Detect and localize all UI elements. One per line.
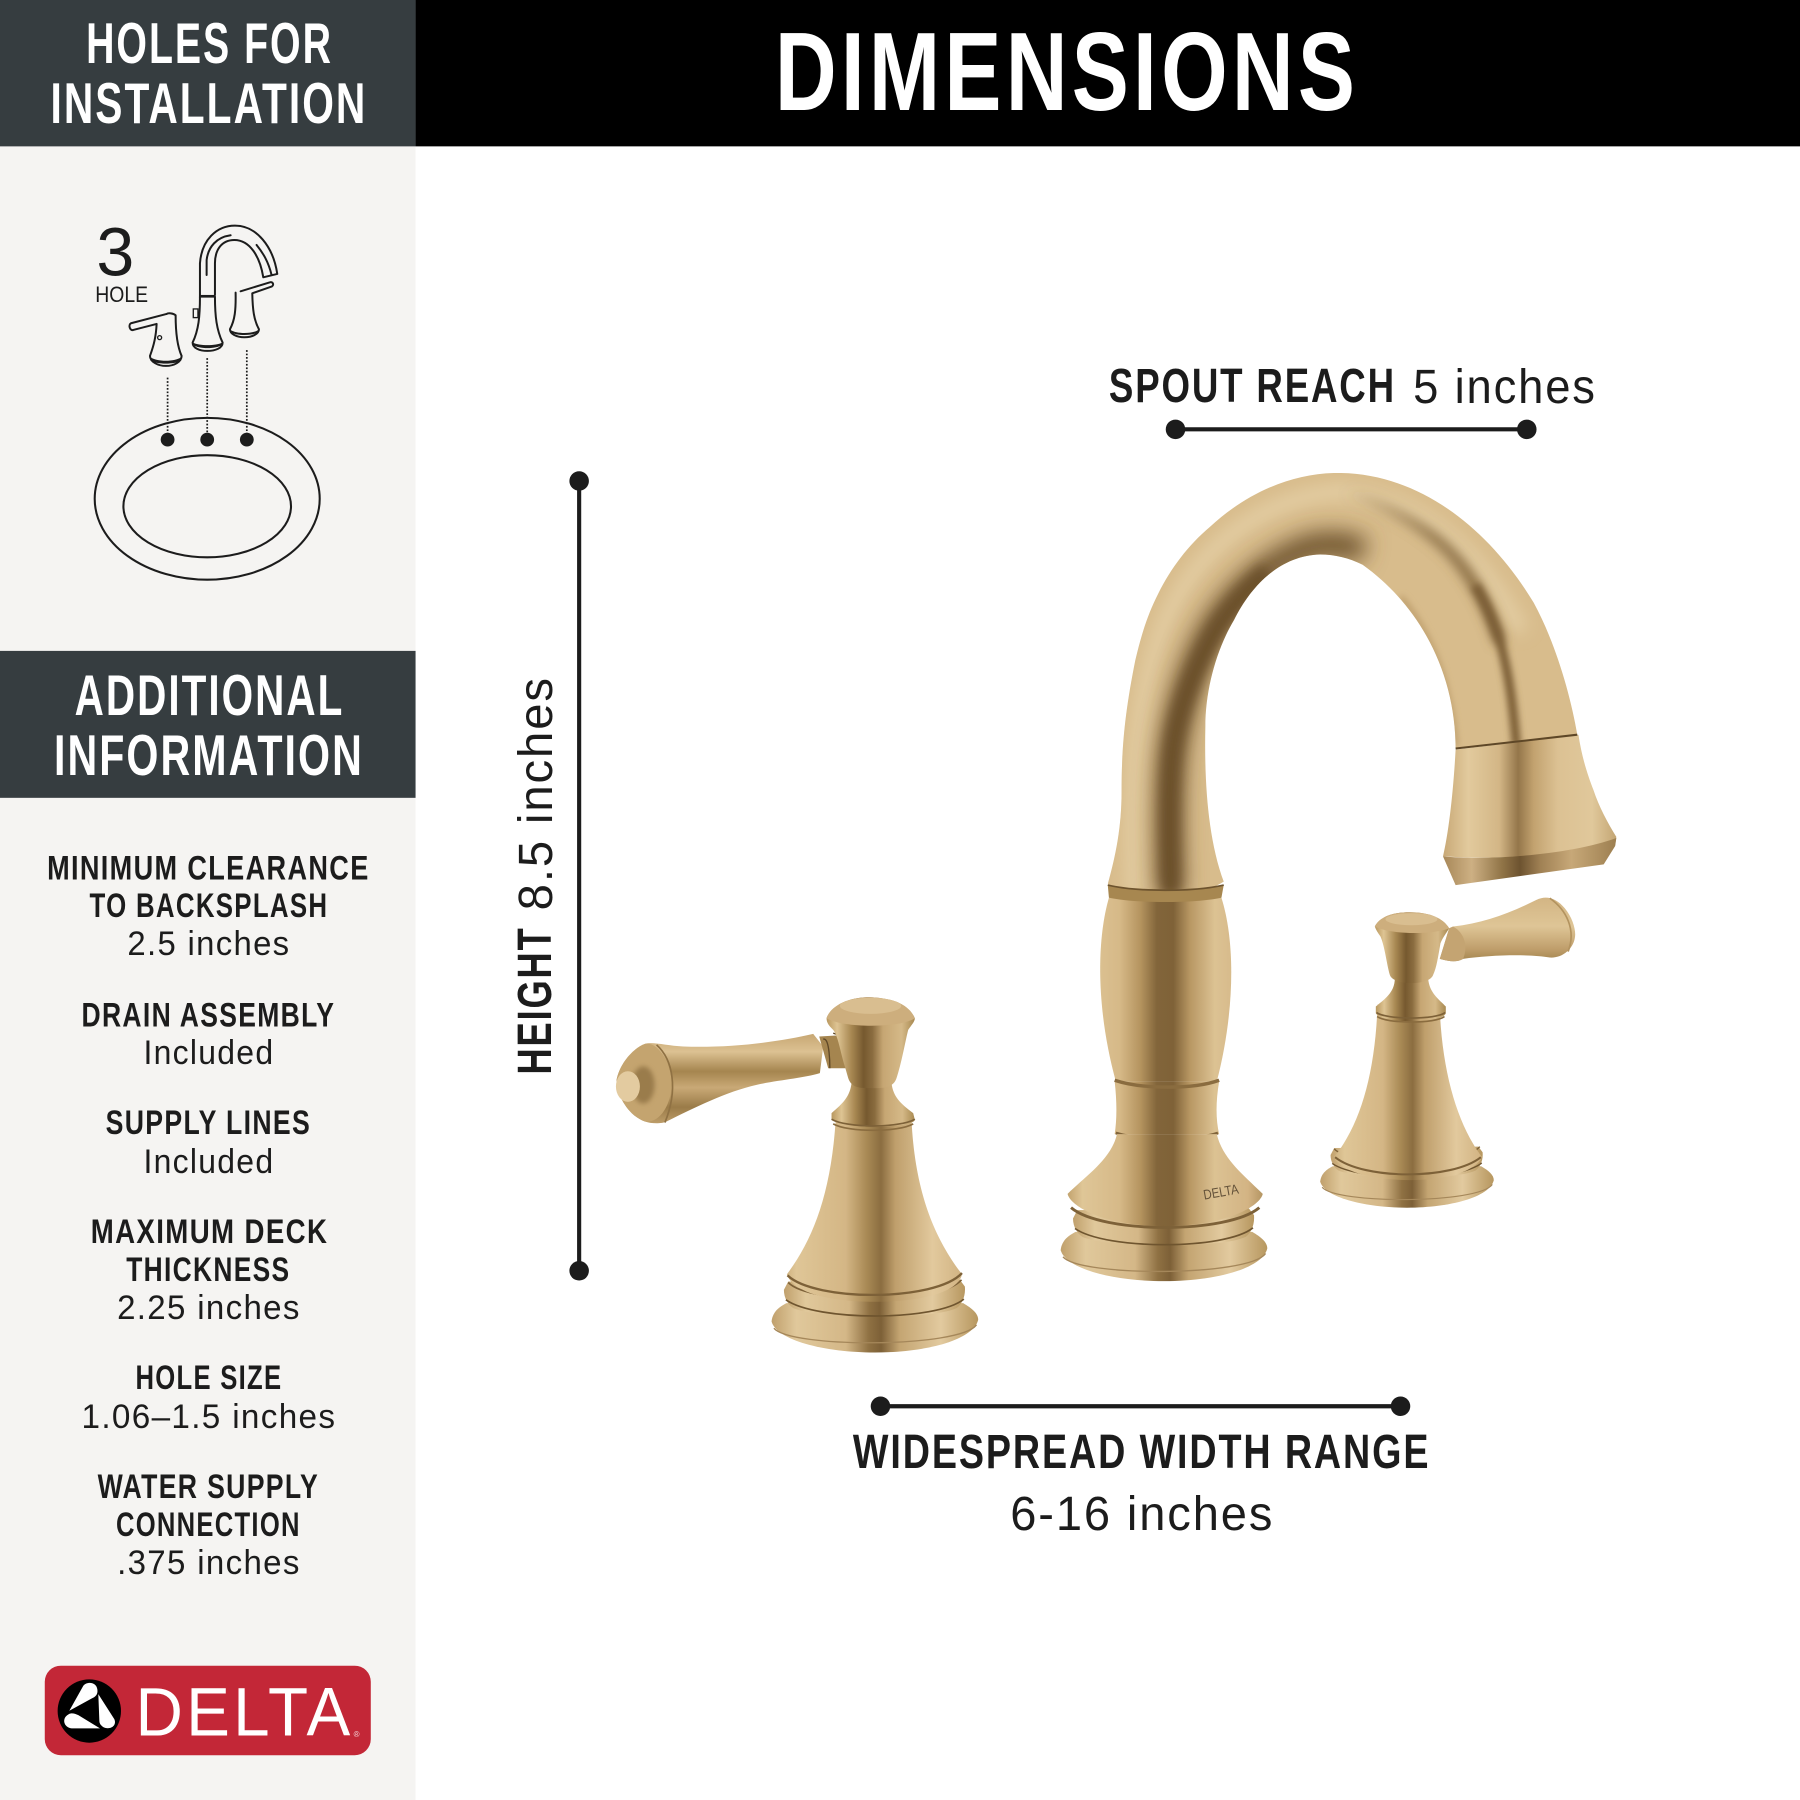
logo: Delta: DELTA [135,1674,354,1751]
text block: hole size: HOLE SIZE [135,1359,282,1397]
text block: minimum clearance [47,849,370,963]
text block: supply lines [106,1104,311,1181]
icon: three hole faucet and sink diagram: 3 [96,214,134,291]
text block: maximum deck thickness: 2.25 inches [117,1289,301,1327]
text block: minimum clearance: TO BACKSPLASH [90,887,328,925]
heading: additional information: ADDITIONAL [75,664,344,728]
faucet left handle [616,997,978,1352]
icon: three hole faucet and sink diagram [95,214,320,580]
text block: water supply connection: .375 inches [117,1544,301,1582]
dimension: spout reach [1109,359,1597,439]
text block: drain assembly [82,996,335,1072]
text block: supply lines: Included [143,1143,274,1181]
faucet body [1061,885,1267,1281]
text block: maximum deck thickness: MAXIMUM DECK [91,1213,328,1251]
cap [827,997,915,1088]
dimension: widespread width range [853,1396,1430,1541]
cap [1375,912,1449,983]
icon: three hole faucet and sink diagram: HOLE [95,282,148,307]
title bar: dimensions [416,0,1800,146]
text block: maximum deck thickness: THICKNESS [126,1251,290,1289]
lever [616,1033,860,1123]
dimension: height [508,471,589,1281]
faucet right handle [1320,898,1575,1208]
dimension: widespread width range: 6-16 inches [1010,1487,1274,1541]
faucet spout [1108,473,1578,890]
heading: holes for installation: INSTALLATION [51,72,367,136]
text block: minimum clearance: MINIMUM CLEARANCE [47,849,370,887]
heading: holes for installation: HOLES FOR [86,12,333,76]
text block: drain assembly: DRAIN ASSEMBLY [82,996,335,1034]
neck collar [1376,978,1446,1022]
heading: additional information [0,651,416,798]
dimension: spout reach: 5 inches [1413,360,1597,414]
text block: water supply connection [98,1468,319,1582]
heading: additional information: INFORMATION [54,724,364,788]
dimension: widespread width range: WIDESPREAD WIDTH RANGE [853,1425,1430,1479]
text block: hole size [82,1359,336,1436]
text block: hole size: 1.06–1.5 inches [82,1398,336,1436]
faucet body: DELTA [1202,1182,1240,1203]
text block: maximum deck thickness [91,1213,328,1327]
text block: supply lines: SUPPLY LINES [106,1104,311,1142]
dimension: height: 8.5 inches [509,676,563,910]
text block: minimum clearance: 2.5 inches [127,925,290,963]
heading: holes for installation [0,0,416,146]
panel: left sidebar [0,0,416,1800]
logo: Delta [45,1666,371,1755]
lever [1440,898,1575,961]
text block: water supply connection: CONNECTION [116,1506,301,1544]
text block: drain assembly: Included [143,1034,274,1072]
neck collar [832,1083,915,1130]
faucet pull-down head [1443,735,1616,885]
title bar: dimensions: DIMENSIONS [775,9,1359,134]
dimension: height: HEIGHT [508,926,562,1074]
illustration: gold faucet [616,459,1616,1352]
text block: water supply connection: WATER SUPPLY [98,1468,319,1506]
dimension: spout reach: SPOUT REACH [1109,359,1396,413]
logo: Delta: ® [354,1730,360,1739]
